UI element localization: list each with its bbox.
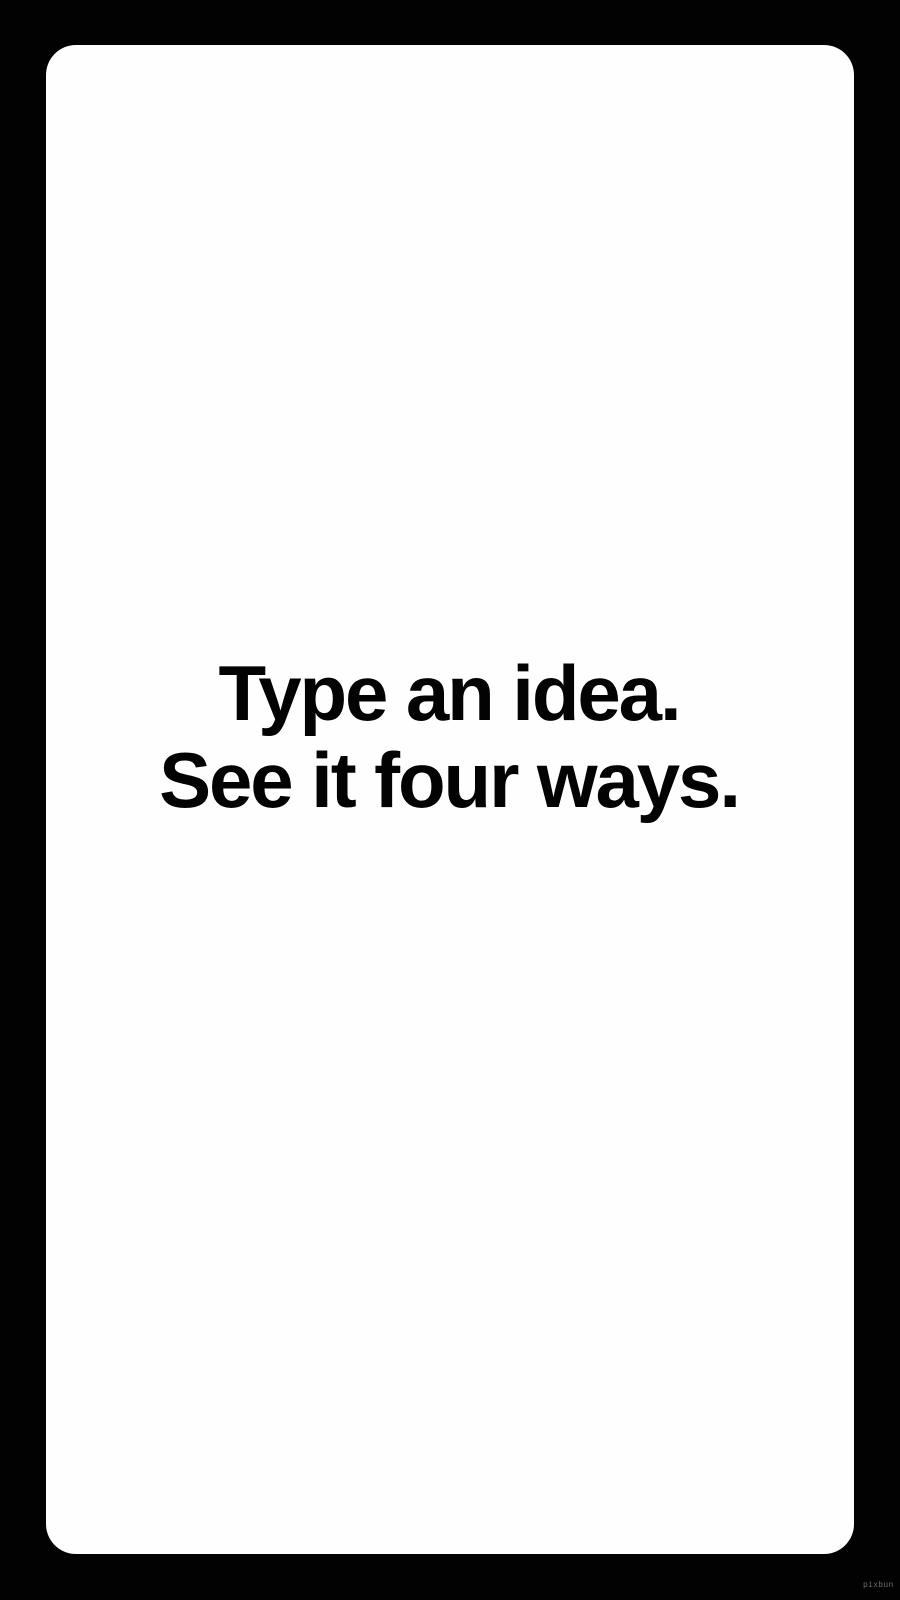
watermark: pixbun	[863, 1581, 894, 1590]
title: Type an idea.	[218, 649, 680, 737]
title	[159, 649, 739, 824]
title: See it four ways.	[159, 736, 739, 824]
